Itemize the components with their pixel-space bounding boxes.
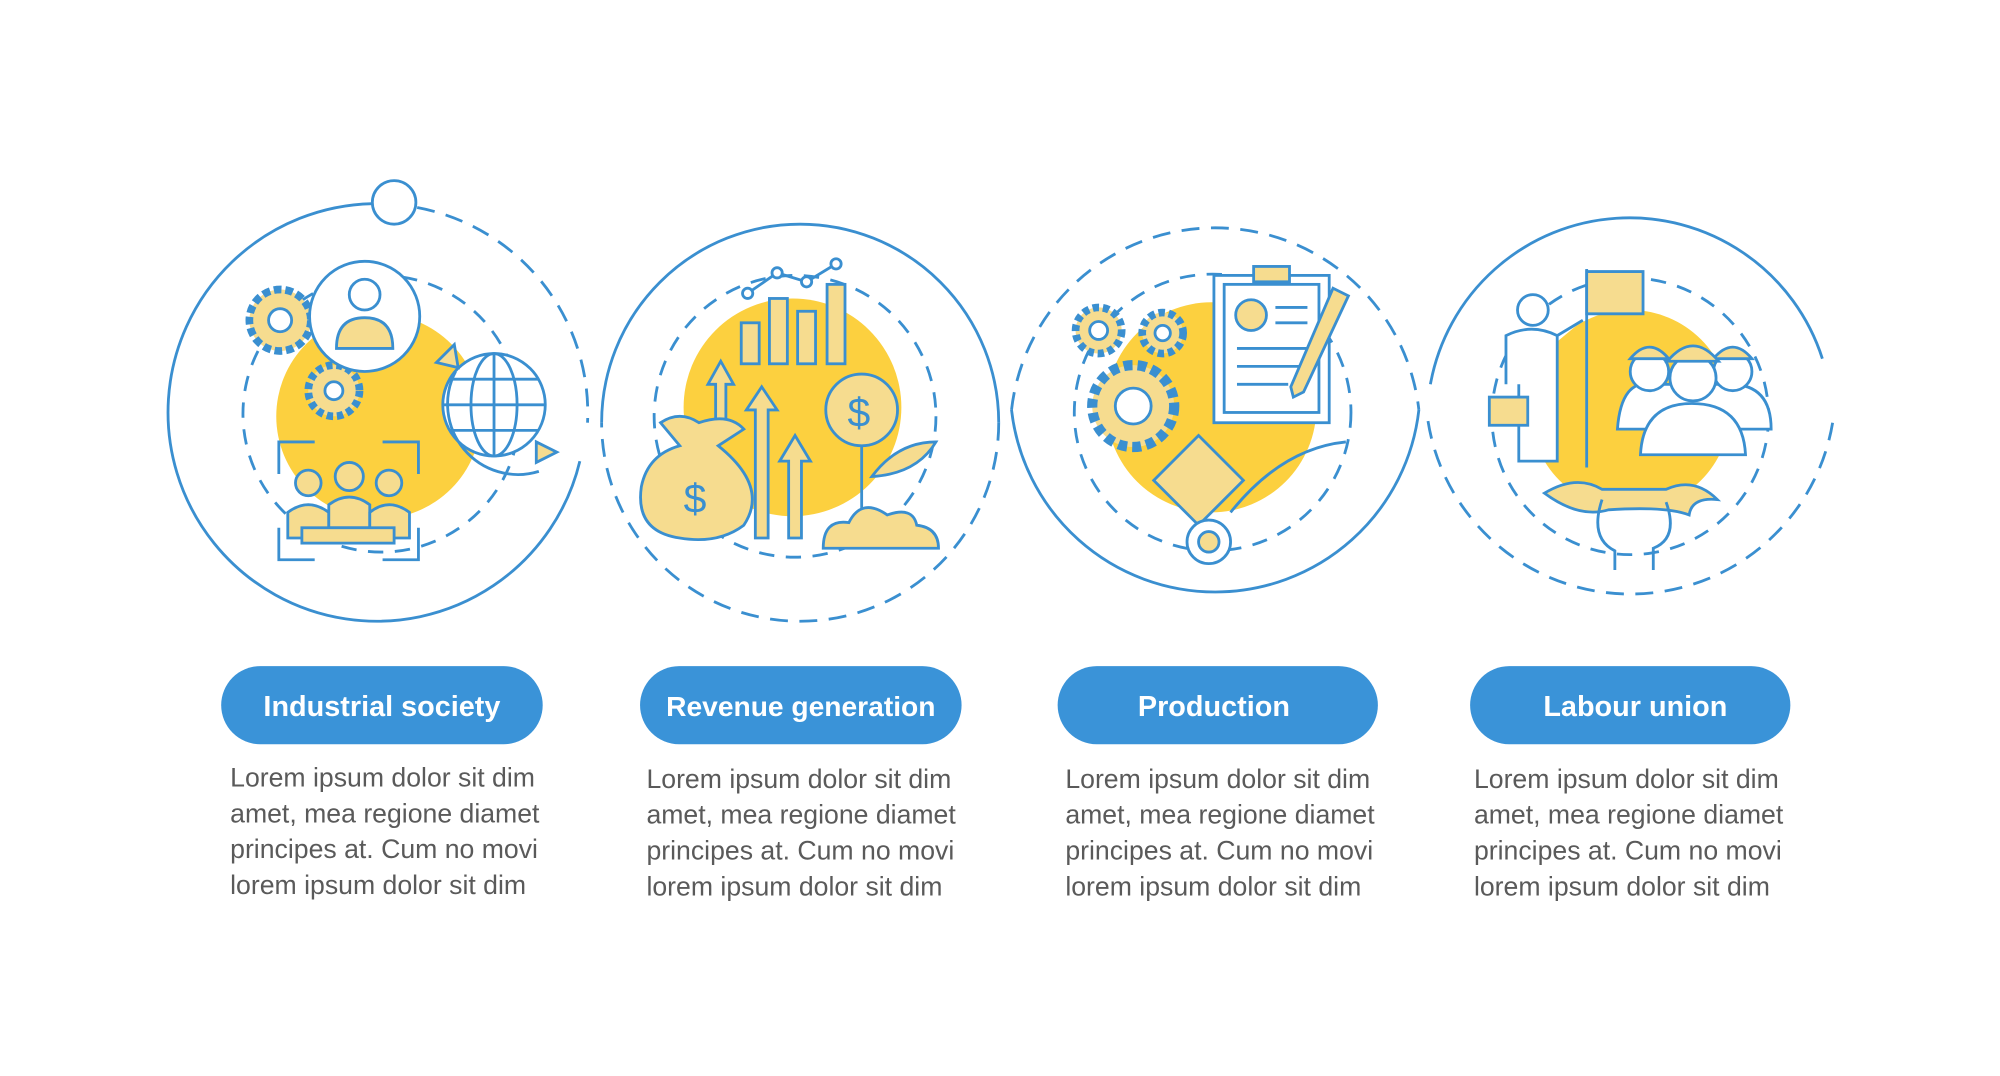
small node [372,181,416,224]
pill: Revenue generation [640,666,962,744]
text block 3: lorem ipsum dolor sit dim [1065,871,1361,901]
text block 1: principes at. Cum no movi [230,834,538,864]
icon: helmets group [1617,346,1771,455]
yellow disc 2 [684,298,901,516]
text block 1: amet, mea regione diamet [230,798,540,828]
pill: Labour union: Labour union [1543,691,1727,723]
yellow disc 4 [1530,310,1730,510]
text block 1 [230,763,540,900]
icon: globe [436,345,557,475]
pill: Production [1058,666,1378,744]
icon: fist with wrench [1544,482,1717,570]
text block 3 [1065,764,1375,901]
text block 2: Lorem ipsum dolor sit dim [646,764,951,794]
pill: Production: Production [1138,691,1290,723]
pill: Labour union [1470,666,1790,744]
panel: production [1012,228,1419,592]
pill: Industrial society: Industrial society [263,691,500,723]
text block 3: principes at. Cum no movi [1065,836,1373,866]
text block 2 [646,764,956,901]
text block 3: Lorem ipsum dolor sit dim [1065,764,1370,794]
text block 1: lorem ipsum dolor sit dim [230,870,526,900]
icon: gears [249,289,360,416]
text block 4 [1474,764,1784,901]
icon: money bag and arrows [641,361,810,540]
text block 2: lorem ipsum dolor sit dim [646,871,942,901]
panel: revenue generation [602,224,999,621]
yellow disc 3 [1106,302,1316,512]
pill: Revenue generation: Revenue generation [666,690,935,722]
text block 4: lorem ipsum dolor sit dim [1474,871,1770,901]
icon: money bag and arrows: $ [684,475,707,521]
pill: Industrial society [221,666,543,744]
text block 1: Lorem ipsum dolor sit dim [230,763,535,793]
text block 2: principes at. Cum no movi [646,836,954,866]
panel: industrial society [168,181,588,621]
icon: person [310,261,420,371]
text block 4: principes at. Cum no movi [1474,836,1782,866]
yellow disc 1 [276,314,481,519]
icon: bar chart [741,259,845,364]
text block 3: amet, mea regione diamet [1065,800,1375,830]
icon: worker with flag [1489,269,1643,468]
icon: coin plant [823,374,939,548]
icon: meeting [279,442,418,560]
text block 2: amet, mea regione diamet [646,800,956,830]
text block 4: Lorem ipsum dolor sit dim [1474,764,1779,794]
icon: coin plant: $ [848,390,871,436]
icon: medal [1154,436,1346,564]
icon: clipboard [1214,266,1348,423]
text block 4: amet, mea regione diamet [1474,800,1784,830]
panel: labour union [1427,218,1833,594]
icon: gears [1076,307,1183,447]
